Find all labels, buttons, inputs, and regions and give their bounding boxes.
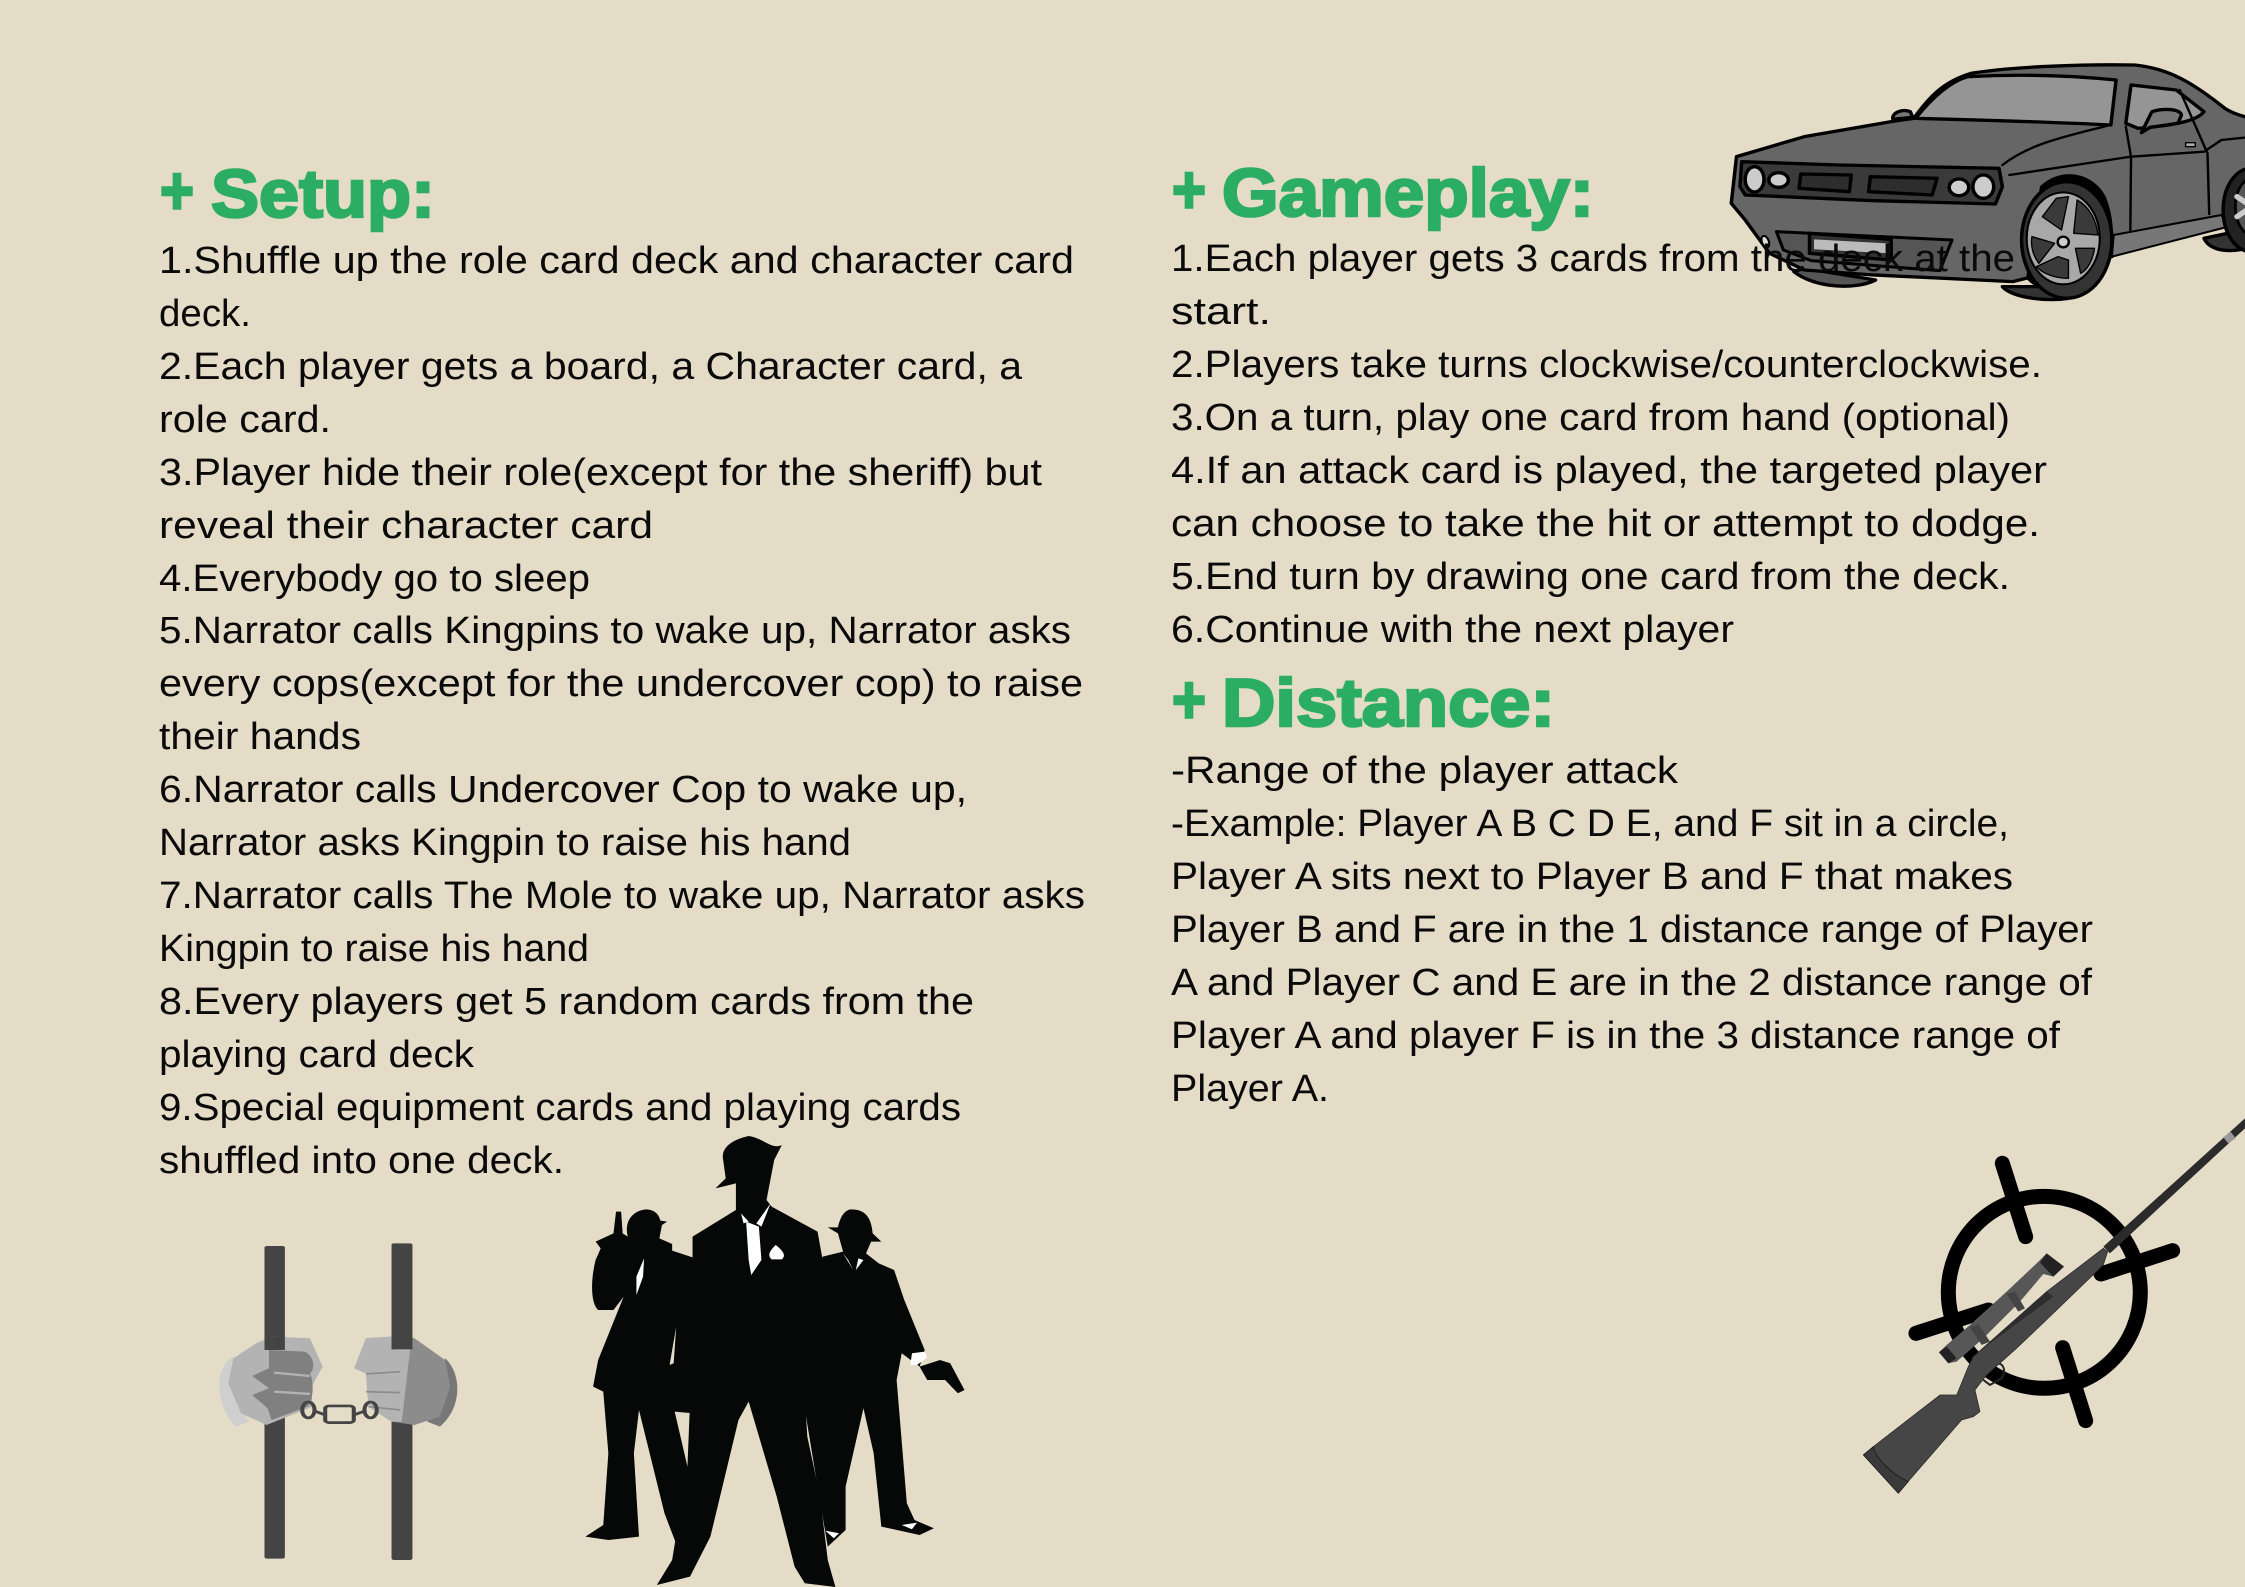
text block: distance explanation: Player B and F are in the 1 distance range of Player	[1171, 909, 2093, 951]
text block: setup steps: their hands	[159, 716, 361, 758]
text block: gameplay steps: 6.Continue with the next player	[1171, 609, 1734, 651]
text block: gameplay steps: 1.Each player gets 3 cards from the deck at the	[1171, 238, 2015, 280]
text block: distance explanation: Player A.	[1171, 1068, 1329, 1110]
text block: gameplay steps: start.	[1171, 291, 1271, 333]
text block: distance explanation: A and Player C and E are in the 2 distance range of	[1171, 962, 2092, 1004]
text block: setup steps: playing card deck	[159, 1034, 475, 1076]
text block: gameplay steps: 4.If an attack card is played, the targeted player	[1171, 450, 2047, 492]
text block: distance explanation: Player A sits next to Player B and F that makes	[1171, 856, 2013, 898]
text block: gameplay steps: 3.On a turn, play one card from hand (optional)	[1171, 397, 2010, 439]
text block: gameplay steps	[1171, 238, 2047, 651]
text block: gameplay steps: 5.End turn by drawing one card from the deck.	[1171, 556, 2010, 598]
text block: setup steps: reveal their character card	[159, 505, 653, 547]
icon: muscle car	[1731, 65, 2245, 300]
icon: rifle over crosshair target	[1863, 1118, 2245, 1493]
heading: Gameplay: +	[1172, 152, 1206, 228]
text block: setup steps: 8.Every players get 5 random cards from the	[159, 981, 974, 1023]
text block: setup steps: 4.Everybody go to sleep	[159, 558, 590, 600]
text block: setup steps: 5.Narrator calls Kingpins to wake up, Narrator asks	[159, 610, 1071, 652]
text block: setup steps: role card.	[159, 399, 331, 441]
text block: distance explanation	[1171, 750, 2093, 1110]
text block: gameplay steps: 2.Players take turns clockwise/counterclockwise.	[1171, 344, 2042, 386]
rifle	[1863, 1118, 2245, 1493]
heading: Gameplay: Gameplay:	[1222, 155, 1594, 231]
text block: setup steps: 3.Player hide their role(except for the sheriff) but	[159, 452, 1042, 494]
heading: Distance: +	[1172, 662, 1206, 738]
text block: setup steps: every cops(except for the undercover cop) to raise	[159, 663, 1083, 705]
icon: three gangster silhouettes	[585, 1136, 964, 1587]
text block: setup steps: 9.Special equipment cards and playing cards	[159, 1087, 961, 1129]
text block: setup steps: 6.Narrator calls Undercover Cop to wake up,	[159, 769, 967, 811]
crosshair target	[1916, 1163, 2173, 1421]
text block: setup steps: Kingpin to raise his hand	[159, 928, 589, 970]
text block: setup steps: 2.Each player gets a board, a Character card, a	[159, 346, 1023, 388]
text block: setup steps: 1.Shuffle up the role card deck and character card	[159, 240, 1074, 282]
text block: setup steps: Narrator asks Kingpin to raise his hand	[159, 822, 851, 864]
text block: setup steps: deck.	[159, 293, 251, 335]
text block: setup steps: 7.Narrator calls The Mole to wake up, Narrator asks	[159, 875, 1085, 917]
heading: Setup: Setup:	[211, 156, 435, 232]
icon: handcuffed hands on prison bars	[219, 1243, 457, 1560]
text block: distance explanation: -Range of the player attack	[1171, 750, 1679, 792]
text block: setup steps: shuffled into one deck.	[159, 1140, 564, 1182]
text block: distance explanation: Player A and player F is in the 3 distance range of	[1171, 1015, 2060, 1057]
text block: distance explanation: -Example: Player A B C D E, and F sit in a circle,	[1171, 803, 2009, 845]
text block: setup steps	[159, 240, 1085, 1182]
text block: gameplay steps: can choose to take the hit or attempt to dodge.	[1171, 503, 2040, 545]
heading: Distance: Distance:	[1222, 665, 1555, 741]
heading: Setup: +	[160, 153, 194, 229]
